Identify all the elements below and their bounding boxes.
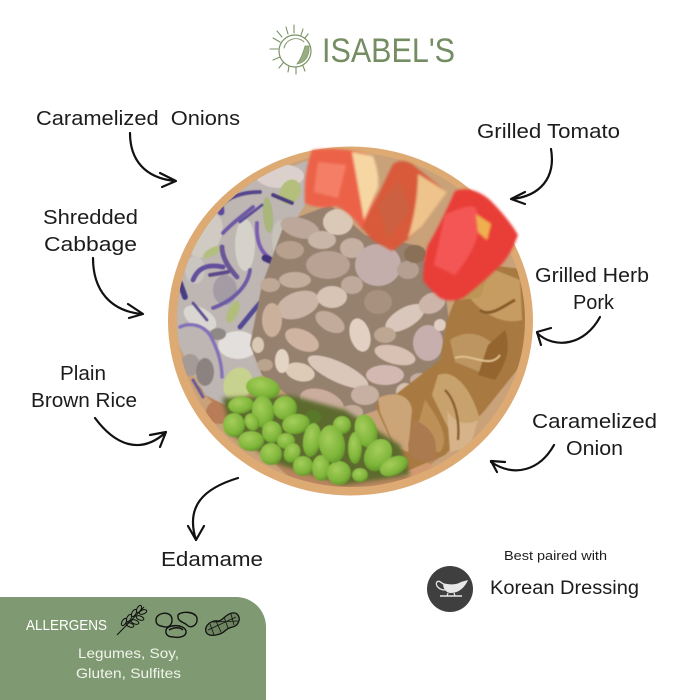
edamame beans bbox=[223, 374, 411, 485]
label: Shredded Cabbage bbox=[43, 207, 138, 256]
grilled herb pork bbox=[250, 205, 452, 423]
label: Shredded Cabbage: Cabbage bbox=[44, 234, 137, 256]
allergens list: Legumes, Soy, bbox=[78, 645, 179, 661]
label: Plain Brown Rice: Brown Rice bbox=[31, 390, 137, 412]
icon: wheat bbox=[117, 605, 147, 635]
rice patches bbox=[195, 385, 450, 487]
icon: sun and leaf bbox=[270, 25, 311, 74]
icon: beans bbox=[156, 612, 197, 637]
arrow: Grilled Tomato bbox=[511, 149, 552, 204]
panel: allergens bbox=[0, 597, 266, 700]
label: Grilled Herb Pork bbox=[535, 265, 649, 314]
label: Grilled Tomato: Grilled Tomato bbox=[477, 121, 620, 143]
bowl rim bbox=[168, 146, 533, 496]
allergens list bbox=[76, 645, 181, 681]
label: Grilled Herb Pork: Pork bbox=[573, 292, 615, 314]
bowl with food bbox=[168, 146, 533, 496]
caramelized onion bbox=[375, 262, 527, 472]
label: Caramelized Onion: Onion bbox=[566, 438, 623, 460]
tomato wedge middle bbox=[362, 161, 447, 251]
label: Caramelized Onion bbox=[532, 411, 657, 460]
logo wordmark: ISABEL'S bbox=[322, 32, 455, 70]
grilled tomato bbox=[305, 149, 518, 300]
logo: Isabel's bbox=[270, 25, 455, 74]
label: Plain Brown Rice: Plain bbox=[60, 363, 106, 385]
icon: gravy boat bbox=[427, 566, 473, 612]
allergens list: Gluten, Sulfites bbox=[76, 665, 181, 681]
label: Plain Brown Rice bbox=[31, 363, 137, 412]
label: Grilled Herb Pork: Grilled Herb bbox=[535, 265, 649, 287]
arrow: Plain Brown Rice bbox=[95, 418, 166, 447]
icon: peanut bbox=[206, 613, 239, 635]
dressing pairing bbox=[427, 548, 639, 612]
shredded cabbage bbox=[174, 160, 310, 405]
arrow: Shredded Cabbage bbox=[93, 258, 143, 318]
allergens heading: ALLERGENS bbox=[26, 618, 107, 634]
label: Caramelized Onions: Caramelized Onions bbox=[36, 108, 240, 130]
tomato wedge right bbox=[423, 189, 518, 300]
arrow: Grilled Herb Pork bbox=[537, 317, 600, 345]
dressing name: Korean Dressing bbox=[490, 578, 639, 599]
arrow: Edamame bbox=[188, 478, 238, 540]
arrow: Caramelized Onions bbox=[130, 133, 176, 187]
edamame base shadow bbox=[222, 395, 410, 485]
tomato wedge left bbox=[305, 149, 378, 229]
label: Shredded Cabbage: Shredded bbox=[43, 207, 138, 229]
bowl interior bbox=[170, 150, 532, 490]
label: Caramelized Onion: Caramelized bbox=[532, 411, 657, 433]
pairing caption: Best paired with bbox=[504, 548, 607, 563]
arrow: Caramelized Onion bbox=[491, 445, 554, 472]
label: Edamame: Edamame bbox=[161, 549, 263, 571]
